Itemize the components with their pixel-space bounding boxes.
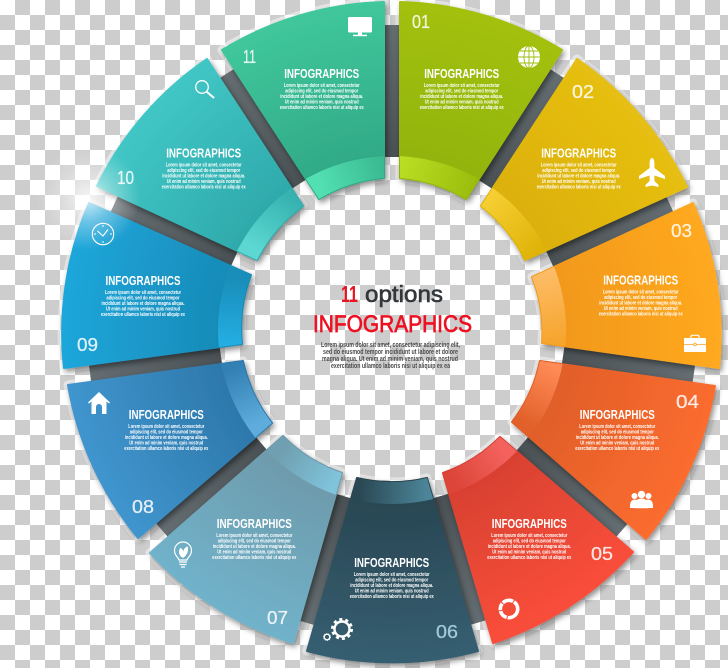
text: 01 heading and body: incididunt ut labore et dolore magna aliqua.: [420, 94, 504, 100]
text: 07 heading and body: [212, 517, 296, 561]
text: 04 heading and body: exercitation ullamco laboris nisi ut aliquip ex: [575, 446, 659, 452]
text: 11 heading and body: Lorem ipsum dolor sit amet, consectetur: [284, 83, 360, 89]
text: 07 heading and body: incididunt ut labore et dolore magna aliqua.: [213, 544, 296, 550]
text: 05 heading and body: Lorem ipsum dolor sit amet, consectetur: [491, 533, 567, 539]
panel: 07 light blue-grey: [148, 435, 348, 650]
text: 03 heading and body: [599, 274, 683, 317]
text: 04 heading and body: [575, 408, 659, 452]
text: 02 heading and body: [537, 146, 621, 190]
icon: magnifier: [196, 81, 214, 98]
text: 03 heading and body: adipiscing elit, sed do eiusmod tempor: [604, 295, 677, 301]
text: 04 heading and body: Ut enim ad minim veniam, quis nostrud: [580, 440, 654, 446]
text: 06 heading and body: adipiscing elit, sed do eiusmod tempor: [355, 577, 428, 583]
text: 10 heading and body: Ut enim ad minim veniam, quis nostrud: [167, 179, 241, 185]
text: 01 heading and body: INFOGRAPHICS: [424, 67, 499, 81]
text: 11 heading and body: [280, 67, 364, 111]
panel: 11 sea green: [220, 0, 391, 206]
text: 11 heading and body: incididunt ut labore et dolore magna aliqua.: [280, 94, 364, 100]
text: 05 heading and body: [487, 517, 571, 561]
number 02: 02: [572, 82, 594, 102]
panel: 03 orange: [530, 202, 728, 376]
text: 03 heading and body: INFOGRAPHICS: [603, 274, 678, 288]
text: 08 heading and body: INFOGRAPHICS: [129, 408, 204, 422]
title line: 11 options: 11: [341, 281, 358, 307]
text: 08 heading and body: Lorem ipsum dolor sit amet, consectetur: [128, 424, 204, 430]
panel: 06 dark teal: [305, 477, 484, 668]
text: 03 heading and body: Ut enim ad minim veniam, quis nostrud: [604, 306, 678, 312]
text: 05 heading and body: INFOGRAPHICS: [492, 517, 567, 531]
text: 07 heading and body: exercitation ullamco laboris nisi ut aliquip ex: [212, 555, 296, 561]
center body text: [321, 340, 460, 370]
icon: segmented ring: [500, 600, 518, 618]
number 10: 10: [117, 168, 134, 188]
text: 03 heading and body: Lorem ipsum dolor sit amet, consectetur: [603, 290, 679, 296]
text: 09 heading and body: adipiscing elit, sed do eiusmod tempor: [106, 295, 180, 301]
light glare at upper left: [36, 146, 140, 250]
icon: briefcase: [684, 335, 706, 352]
icon: people: [630, 491, 653, 508]
text: 08 heading and body: incididunt ut labore et dolore magna aliqua.: [125, 435, 208, 441]
center body text: Lorem ipsum dolor sit amet, consectetur adipiscing elit,: [321, 340, 460, 349]
text: 04 heading and body: INFOGRAPHICS: [580, 408, 655, 422]
number 05: 05: [591, 544, 613, 564]
text: 05 heading and body: incididunt ut labore et dolore magna aliqua.: [488, 544, 571, 550]
panel: 09 cyan blue: [59, 202, 256, 375]
icon: house: [88, 392, 110, 414]
icon: globe: [518, 46, 540, 68]
text: 02 heading and body: Ut enim ad minim veniam, quis nostrud: [542, 179, 616, 185]
icon: airplane: [639, 158, 665, 187]
text: 04 heading and body: adipiscing elit, sed do eiusmod tempor: [581, 429, 654, 435]
text: 10 heading and body: INFOGRAPHICS: [166, 146, 241, 160]
panel: 05 red: [441, 436, 638, 650]
text: 03 heading and body: incididunt ut labore et dolore magna aliqua.: [599, 300, 683, 306]
panel: 04 deep orange: [510, 360, 722, 546]
text: 09 heading and body: exercitation ullamco laboris nisi ut aliquip ex: [101, 312, 185, 318]
text: 06 heading and body: [350, 556, 434, 600]
icon: gears: [324, 620, 352, 640]
center body text: magna aliqua. Ut enim ad minim veniam, quis nostrud: [322, 354, 458, 363]
text: 10 heading and body: exercitation ullamco laboris nisi ut aliquip ex: [162, 184, 246, 190]
number 06: 06: [436, 622, 458, 642]
number 08: 08: [132, 497, 154, 517]
center body text: exercitation ullamco laboris nisi ut aliquip ex ea: [331, 361, 451, 370]
panel: 01 green: [397, 0, 568, 206]
icon: light bulb: [174, 542, 192, 567]
icon: monitor: [348, 17, 372, 36]
text: 01 heading and body: exercitation ullamco laboris nisi ut aliquip ex: [420, 105, 504, 111]
text: 10 heading and body: Lorem ipsum dolor sit amet, consectetur: [166, 162, 242, 168]
text: 02 heading and body: adipiscing elit, sed do eiusmod tempor: [542, 168, 615, 174]
number 03: 03: [671, 221, 692, 241]
text: 02 heading and body: Lorem ipsum dolor sit amet, consectetur: [541, 162, 617, 168]
title line: INFOGRAPHICS: INFOGRAPHICS: [313, 311, 472, 338]
text: 09 heading and body: Lorem ipsum dolor sit amet, consectetur: [105, 290, 181, 296]
dark connector bars between panels: [88, 25, 696, 626]
text: 04 heading and body: Lorem ipsum dolor sit amet, consectetur: [579, 424, 655, 430]
text: 06 heading and body: Lorem ipsum dolor sit amet, consectetur: [354, 572, 430, 578]
text: 06 heading and body: incididunt ut labore et dolore magna aliqua.: [350, 583, 434, 589]
title line: 11 options: options: [365, 281, 443, 307]
text: 06 heading and body: exercitation ullamco laboris nisi ut aliquip ex: [350, 594, 434, 600]
text: 11 heading and body: Ut enim ad minim veniam, quis nostrud: [285, 99, 359, 105]
text: 02 heading and body: incididunt ut labore et dolore magna aliqua.: [537, 173, 621, 179]
number 01: 01: [412, 12, 430, 32]
text: 08 heading and body: exercitation ullamco laboris nisi ut aliquip ex: [124, 446, 208, 452]
text: 11 heading and body: INFOGRAPHICS: [284, 67, 359, 81]
text: 07 heading and body: adipiscing elit, sed do eiusmod tempor: [218, 538, 291, 544]
text: 11 heading and body: adipiscing elit, sed do eiusmod tempor: [285, 88, 358, 94]
icon: clock: [92, 223, 114, 245]
center body text: sed do eiusmod tempor incididunt ut labore et dolore: [323, 347, 458, 356]
text: 11 heading and body: exercitation ullamco laboris nisi ut aliquip ex: [280, 105, 364, 111]
panel: 08 blue: [66, 360, 278, 544]
text: 01 heading and body: [420, 67, 504, 111]
number 09: 09: [77, 335, 98, 355]
center title: [313, 281, 472, 370]
number 04: 04: [676, 392, 699, 412]
text: 09 heading and body: Ut enim ad minim veniam, quis nostrud: [106, 306, 180, 312]
text: 09 heading and body: INFOGRAPHICS: [106, 274, 180, 288]
text: 01 heading and body: Lorem ipsum dolor sit amet, consectetur: [424, 83, 500, 89]
text: 09 heading and body: [101, 274, 185, 318]
text: 08 heading and body: Ut enim ad minim veniam, quis nostrud: [129, 440, 203, 446]
number 07: 07: [267, 608, 288, 628]
text: 03 heading and body: exercitation ullamco laboris nisi ut aliquip ex: [599, 311, 683, 317]
text: 09 heading and body: incididunt ut labore et dolore magna aliqua.: [102, 301, 185, 307]
text: 06 heading and body: Ut enim ad minim veniam, quis nostrud: [355, 588, 429, 594]
text: 05 heading and body: adipiscing elit, sed do eiusmod tempor: [493, 538, 566, 544]
text: 07 heading and body: Ut enim ad minim veniam, quis nostrud: [217, 549, 291, 555]
panel: 02 yellow: [479, 58, 693, 267]
text: 10 heading and body: adipiscing elit, sed do eiusmod tempor: [167, 168, 240, 174]
text: 06 heading and body: INFOGRAPHICS: [354, 556, 429, 570]
text: 05 heading and body: Ut enim ad minim veniam, quis nostrud: [492, 549, 566, 555]
text: 02 heading and body: INFOGRAPHICS: [541, 146, 616, 160]
text: 01 heading and body: Ut enim ad minim veniam, quis nostrud: [425, 99, 499, 105]
text: 07 heading and body: Lorem ipsum dolor sit amet, consectetur: [216, 533, 292, 539]
text: 02 heading and body: exercitation ullamco laboris nisi ut aliquip ex: [537, 184, 621, 190]
text: 08 heading and body: adipiscing elit, sed do eiusmod tempor: [130, 429, 203, 435]
text: 10 heading and body: incididunt ut labore et dolore magna aliqua.: [162, 173, 246, 179]
text: 07 heading and body: INFOGRAPHICS: [217, 517, 292, 531]
text: 05 heading and body: exercitation ullamco laboris nisi ut aliquip ex: [487, 555, 571, 561]
text: 01 heading and body: adipiscing elit, sed do eiusmod tempor: [425, 88, 498, 94]
text: 08 heading and body: [124, 408, 208, 452]
text: 10 heading and body: [162, 146, 246, 190]
panel: 10 teal: [96, 58, 308, 267]
text: 04 heading and body: incididunt ut labore et dolore magna aliqua.: [576, 435, 659, 441]
number 11: 11: [243, 47, 256, 67]
